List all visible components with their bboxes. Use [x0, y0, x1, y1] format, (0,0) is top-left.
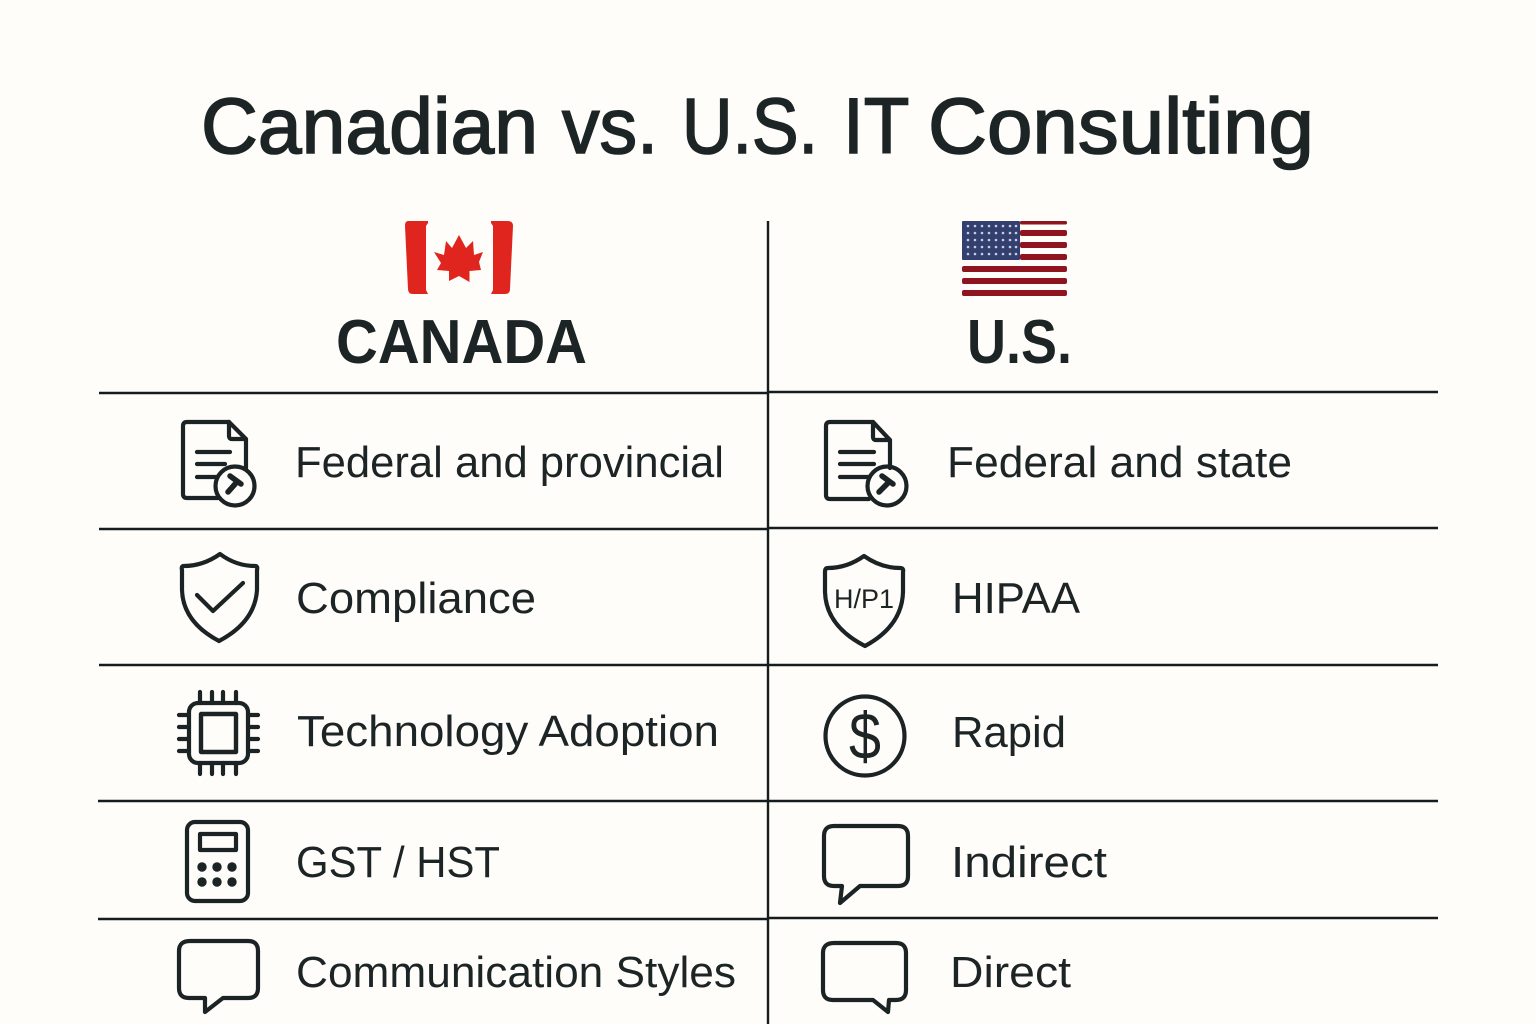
- icon: microchip: [179, 692, 258, 774]
- heading: U.S.: U.S.: [967, 308, 1072, 377]
- label: Indirect: Indirect: [951, 838, 1107, 887]
- label: Federal and provincial: Federal and provincial: [295, 438, 724, 487]
- label: Technology Adoption: Technology Adoption: [297, 707, 719, 756]
- icon: shield with H/P1: [825, 556, 903, 646]
- icon: calculator: [187, 822, 248, 901]
- label: Rapid: Rapid: [952, 708, 1066, 757]
- title: IT: [843, 81, 908, 170]
- icon: document and gavel, Canada: [183, 422, 254, 506]
- icon: speech bubble, Communication Styles: [179, 941, 258, 1012]
- icon: dollar coin: $: [849, 699, 881, 773]
- label: Compliance: Compliance: [296, 574, 536, 623]
- label: Communication Styles: Communication Styles: [296, 948, 736, 997]
- icon: shield with H/P1: H/P1: [834, 584, 894, 614]
- label: Federal and state: Federal and state: [947, 438, 1292, 487]
- label: GST / HST: GST / HST: [296, 838, 500, 887]
- icon: speech bubble, Indirect: [824, 826, 908, 903]
- heading: Canada: CANADA: [336, 308, 587, 377]
- icon: dollar coin: [826, 696, 904, 776]
- icon: U.S. flag: [962, 221, 1067, 296]
- title: U.S.: [682, 81, 818, 170]
- label: Direct: Direct: [950, 948, 1071, 997]
- icon: shield with check: [182, 554, 257, 641]
- title: Canadian: [201, 81, 538, 170]
- label: HIPAA: HIPAA: [952, 574, 1081, 623]
- title: Consulting: [928, 81, 1314, 170]
- icon: document and gavel, U.S.: [826, 422, 906, 506]
- icon: speech bubble, Direct: [823, 943, 906, 1012]
- title: vs.: [562, 81, 658, 170]
- icon: Canadian flag: [405, 221, 513, 294]
